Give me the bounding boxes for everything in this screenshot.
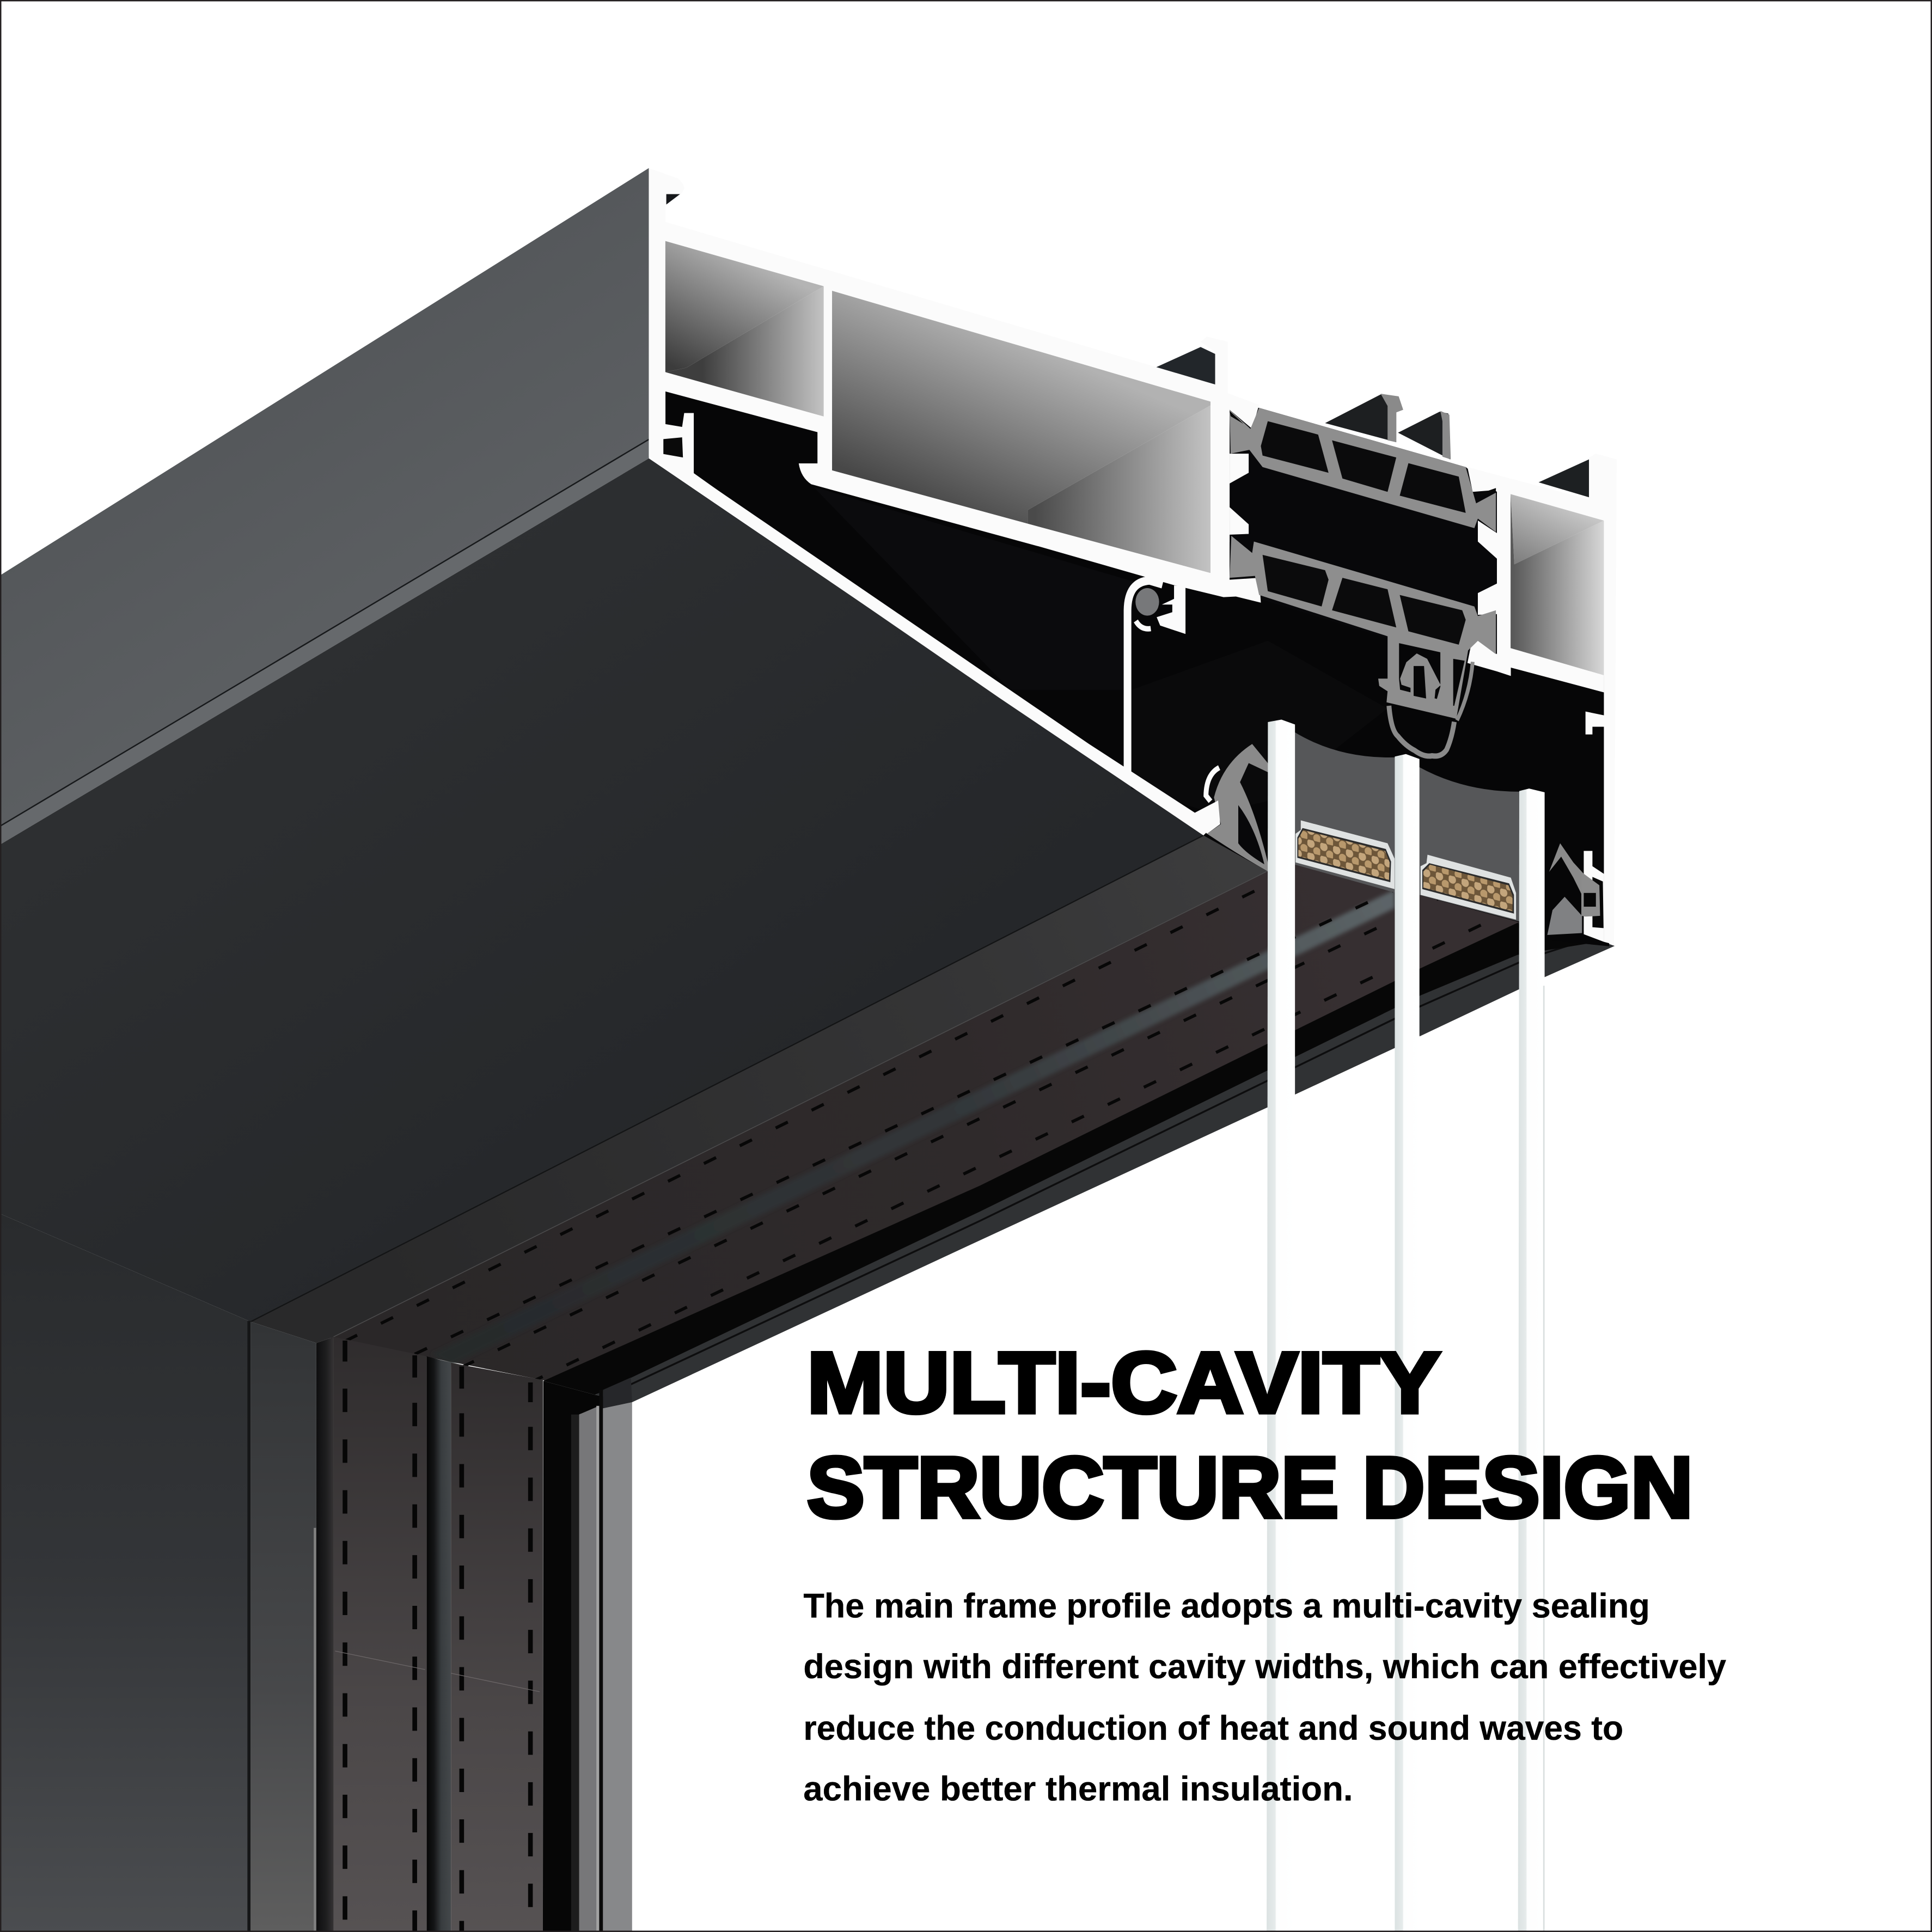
left glazing gasket (1195, 744, 1269, 872)
U-shaped weather seal (1389, 706, 1454, 756)
soffit face (0, 458, 1203, 1322)
heading line 2: STRUCTURE DESIGN (807, 1439, 1693, 1536)
left aluminium profile (649, 168, 1257, 597)
insulating cavities of glazing (1195, 732, 1604, 942)
insulating spacer 1 (1295, 821, 1395, 889)
profile cross-section (649, 168, 1617, 1932)
heading (807, 1335, 1693, 1536)
outer side face of frame (0, 168, 649, 826)
black gap inside thermal break (1230, 404, 1497, 671)
foot cavity and mushroom clip (1399, 643, 1440, 699)
white claws around thermal break (1210, 387, 1261, 603)
slot rows on horizontal channel (345, 863, 1501, 1383)
triple glass panes (1267, 719, 1545, 1932)
right hollow chamber (1511, 494, 1604, 675)
glass pane 3 (1518, 788, 1545, 1932)
heading line 1: MULTI-CAVITY (807, 1335, 1440, 1431)
slot rows on jamb (345, 1389, 530, 1932)
body text (803, 1587, 1726, 1808)
large hollow chamber (832, 291, 1215, 574)
glass pane 1 (1267, 719, 1295, 1932)
insulating spacer 2 (1421, 855, 1516, 920)
diagonal white flange (649, 456, 1220, 835)
black rubber seal band (543, 923, 1602, 1395)
thermal break and right profile (1128, 387, 1617, 945)
body text: design with different cavity widths, which can effectively (803, 1648, 1726, 1686)
body text: achieve better thermal insulation. (803, 1770, 1353, 1808)
small hollow chamber (665, 241, 824, 417)
body text: reduce the conduction of heat and sound waves to (803, 1709, 1623, 1747)
reveal: horizontal frame channel (250, 835, 1615, 1402)
polyamide top bar (1230, 408, 1496, 532)
right glazing clip (1548, 843, 1604, 942)
left wall (0, 1214, 250, 1932)
window frame illustration (0, 168, 1617, 1932)
dark rear leg pieces (1155, 347, 1215, 384)
polyamide bottom bar with foot (1230, 536, 1496, 756)
body text: The main frame profile adopts a multi-cavity sealing (803, 1587, 1650, 1625)
black interior of section (665, 370, 1609, 946)
dark grey strip along frame edge (595, 941, 1615, 1402)
frame seam strip (0, 439, 649, 845)
vertical frame jamb (247, 1321, 632, 1932)
gasket carrier hook (1128, 580, 1185, 773)
rib highlight (431, 890, 1395, 1365)
glass pane 2 (1395, 754, 1421, 1932)
